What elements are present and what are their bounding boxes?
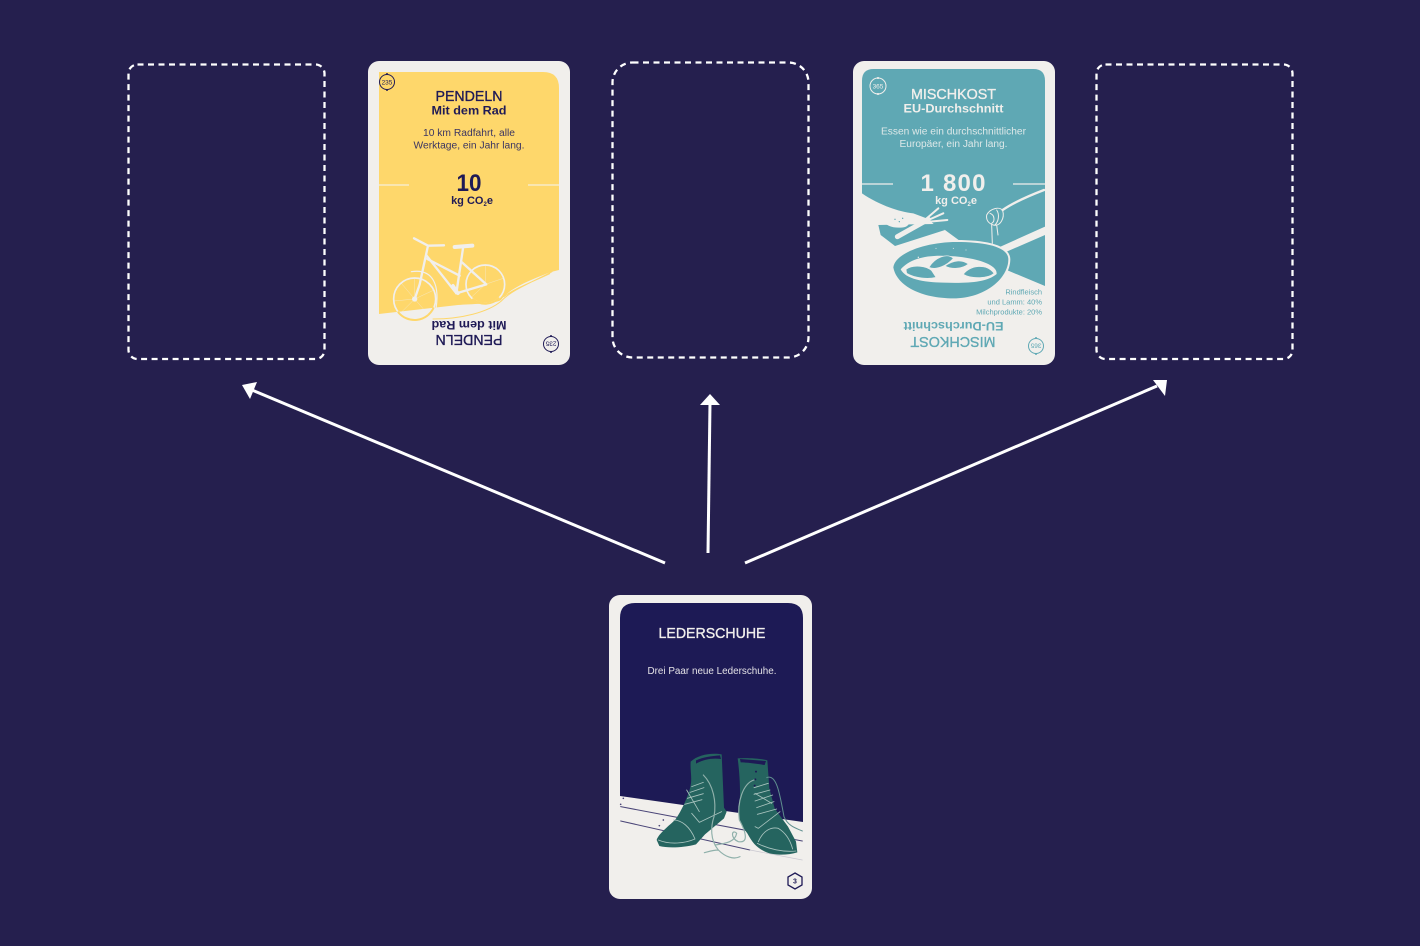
left boot [657,754,740,858]
description: Essen wie ein durchschnittlicher [881,126,1027,138]
pan [891,240,1010,300]
inverted subheading: Mit dem Rad [432,318,506,332]
frame [411,238,486,312]
footnote: Rindfleisch [1005,288,1042,296]
circular day badge bottom: 365 [1030,342,1041,348]
arrow: to centre slot [700,394,720,553]
food illustration with teal face [862,69,1045,300]
circular day badge top: 235 [382,80,393,86]
arrow: to right slot [745,380,1167,563]
description: Europäer, ein Jahr lang. [900,139,1008,150]
description [881,126,1027,150]
icon: bicycle [394,238,552,320]
inverted heading: PENDELN [436,331,502,347]
empty card slot: centre [612,62,808,358]
fork and pasta [987,190,1044,243]
floorboards [621,807,802,850]
laces and stitching [715,777,802,851]
unit: kg CO [935,195,967,207]
yellow card face [379,72,559,314]
empty card slot: right [1096,64,1292,359]
heading: MISCHKOST [911,86,996,103]
unit: kg CO [451,195,483,207]
bread [884,215,910,228]
illustration: boots on floorboards [620,754,802,860]
circular day badge top [380,73,394,91]
footnote: Milchprodukte: 20% [976,308,1042,316]
footnote [976,288,1042,316]
empty card slot: left [128,64,324,359]
hexagon value badge [788,873,802,889]
circular day badge bottom [1028,337,1044,355]
right boot [715,758,802,855]
footnote: und Lamm: 40% [987,298,1042,306]
card: Mischkost, EU-Durchschnitt [853,61,1055,365]
road swoosh [433,272,552,319]
heading: LEDERSCHUHE [658,626,766,642]
card: Pendeln, mit dem Rad [368,61,570,365]
description: 10 km Radfahrt, alle [423,128,515,139]
card: Lederschuhe [609,595,812,899]
circular day badge bottom [544,335,558,353]
subheading: EU-Durchschnitt [904,102,1004,116]
circular day badge bottom: 235 [545,340,556,346]
subheading: Mit dem Rad [432,104,506,118]
unit: e [971,195,977,207]
value: 10 [456,170,482,197]
leek [897,219,928,237]
value: 1 800 [920,170,986,197]
cutting board [878,224,945,246]
description [414,128,524,152]
circular day badge top [870,77,886,95]
unit: 2 [967,202,971,208]
divider lines [379,184,559,186]
wheels [394,278,436,320]
inverted subheading: EU-Durchschnitt [903,319,1004,333]
navy card face [620,603,803,822]
description: Drei Paar neue Lederschuhe. [648,666,776,677]
arrow: to left slot [242,382,665,563]
inverted heading: MISCHKOST [910,333,996,350]
unit: e [487,195,493,207]
heading: PENDELN [436,89,502,105]
description: Werktage, ein Jahr lang. [414,140,524,152]
divider lines [862,183,1045,185]
laces and stitching [658,775,740,858]
circular day badge top: 365 [873,84,884,90]
unit: 2 [483,202,487,208]
hexagon value badge: 3 [793,878,797,886]
